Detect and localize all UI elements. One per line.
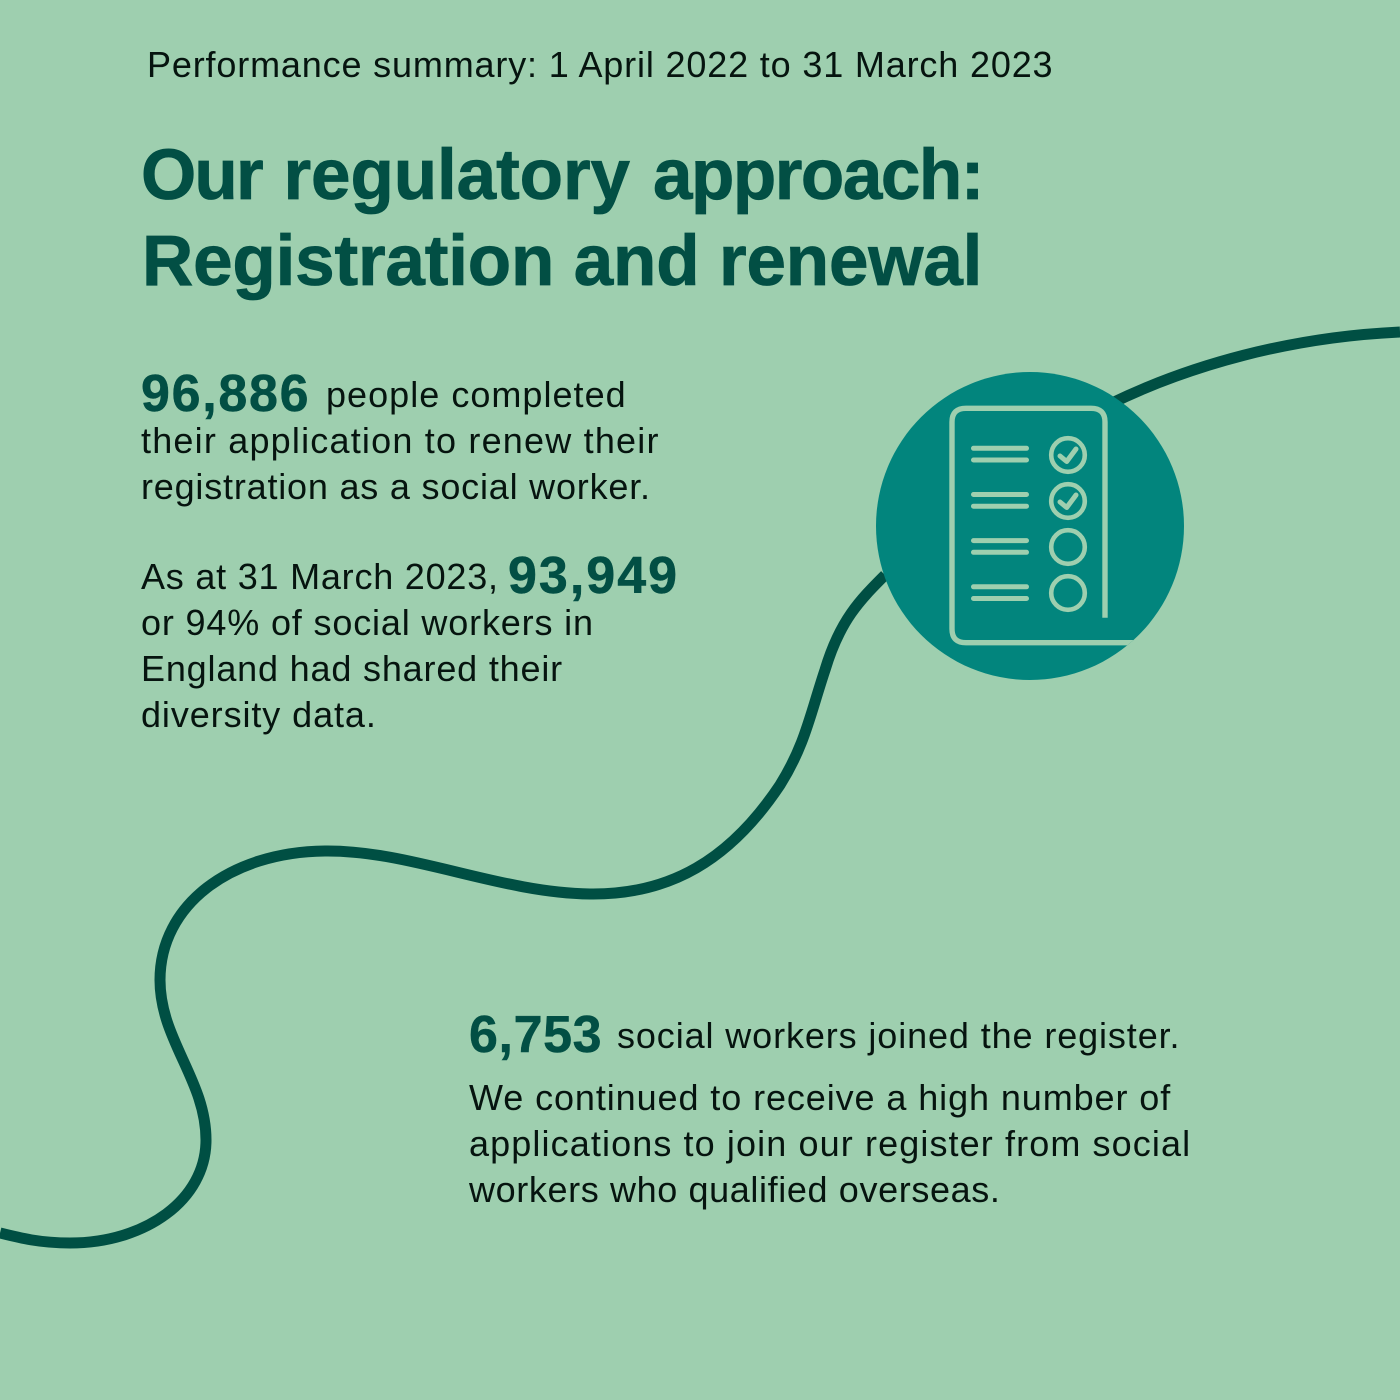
stat: diversity data: England had shared their bbox=[141, 648, 563, 689]
stat: diversity data: or 94% of social workers in bbox=[141, 602, 594, 643]
stat: joiners: social workers joined the register. bbox=[617, 1015, 1180, 1056]
period heading: Performance summary: 1 April 2022 to 31 March 2023 bbox=[147, 44, 1053, 85]
stat: diversity data: diversity data. bbox=[141, 694, 377, 735]
stat: joiners: 6,753 bbox=[469, 1006, 602, 1064]
stat: joiners bbox=[469, 1006, 1180, 1064]
wavy line bbox=[0, 332, 1400, 1243]
title: Registration and renewal bbox=[142, 222, 982, 301]
stat: diversity data: As at 31 March 2023, bbox=[141, 556, 499, 597]
icon: checklist in circle bbox=[876, 372, 1184, 680]
text: overseas applications: We continued to receive a high number of bbox=[469, 1077, 1171, 1118]
stat: diversity data bbox=[141, 547, 679, 735]
stat: renewals: people completed bbox=[326, 374, 627, 415]
stat: renewals bbox=[141, 365, 660, 507]
title: regulatory bbox=[284, 136, 630, 215]
title: Our bbox=[141, 136, 262, 215]
curved line and icon bbox=[0, 326, 1400, 1248]
title: approach: bbox=[653, 136, 983, 215]
stat: renewals: registration as a social worker. bbox=[141, 466, 651, 507]
text: overseas applications: applications to join our register from social bbox=[469, 1123, 1191, 1164]
stat: renewals: their application to renew their bbox=[141, 420, 660, 461]
stat: renewals: 96,886 bbox=[141, 365, 310, 423]
title bbox=[141, 136, 983, 301]
stat: diversity data: 93,949 bbox=[508, 547, 679, 605]
text: overseas applications: workers who qualified overseas. bbox=[469, 1169, 1000, 1210]
text: overseas applications bbox=[469, 1077, 1191, 1210]
